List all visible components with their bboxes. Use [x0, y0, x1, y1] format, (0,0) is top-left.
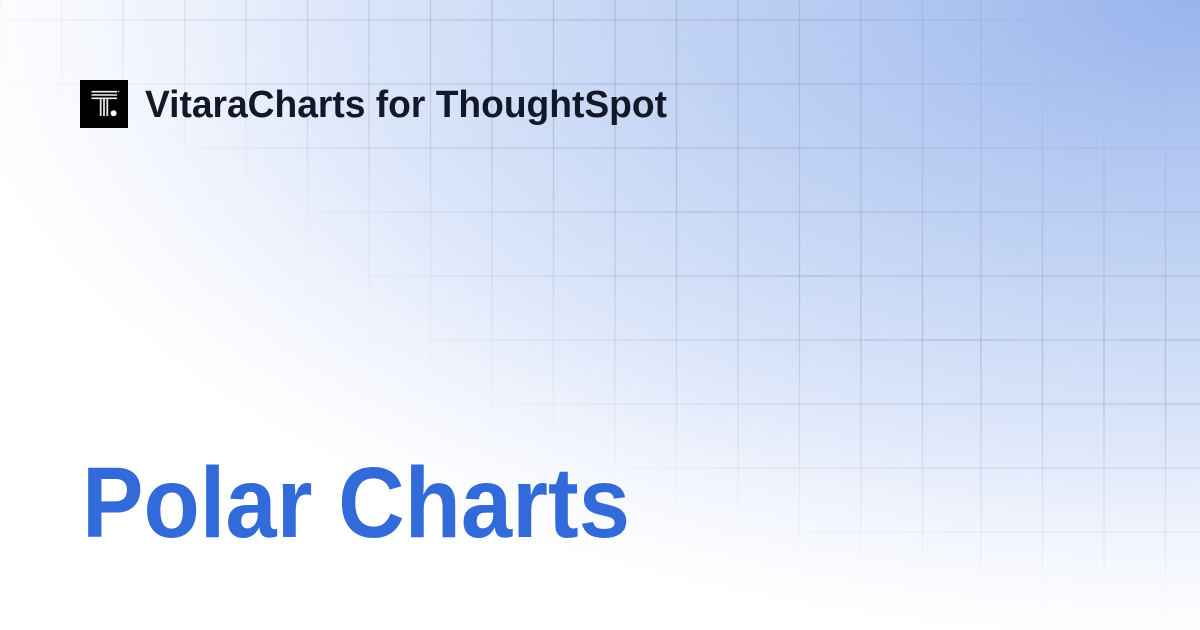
page title: Polar Charts [82, 447, 630, 559]
brand heading: VitaraCharts for ThoughtSpot [145, 84, 667, 126]
icon: VitaraCharts logo [80, 80, 128, 128]
